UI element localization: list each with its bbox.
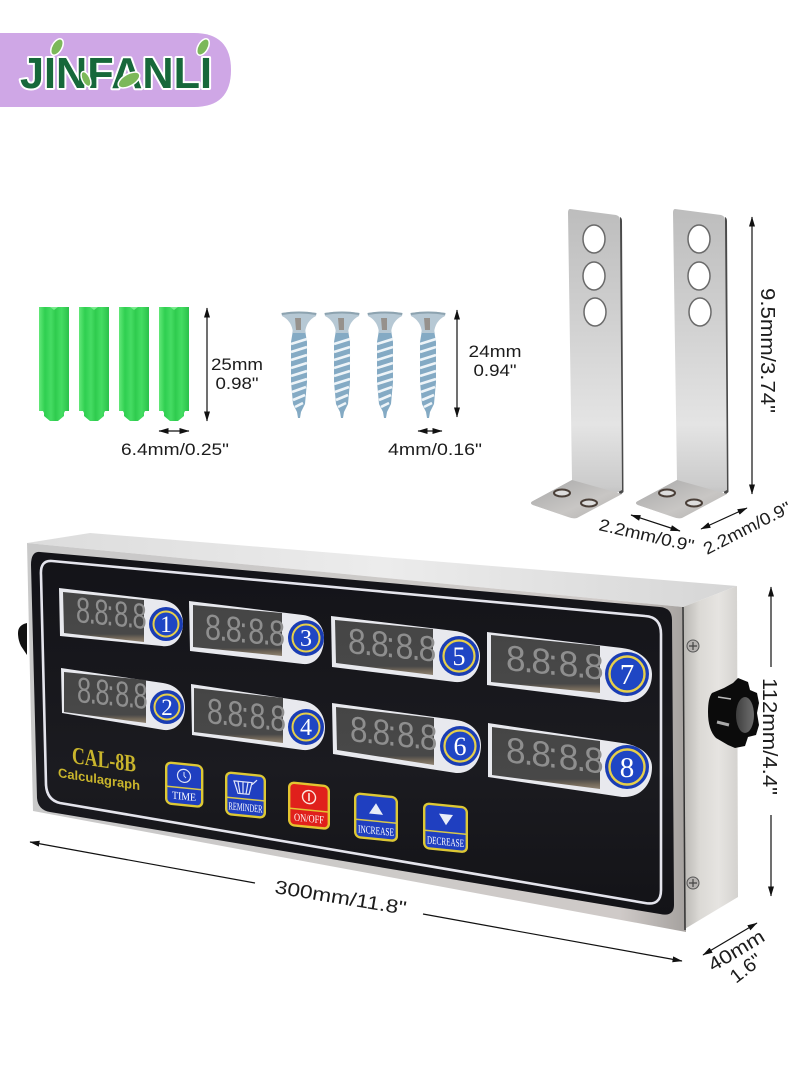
timer device [18, 533, 759, 932]
timer display 1: 8.8:8.8 [76, 590, 147, 637]
left bracket foot label: 2.2mm/0.9" [597, 515, 696, 556]
left side knob [18, 623, 27, 655]
anchor length arrow [206, 308, 208, 421]
timer display 1: 1 [160, 612, 172, 637]
timer display 5: 5 [452, 642, 466, 671]
timer display 6: 8.8:8.8 [350, 709, 437, 759]
screw length arrow [456, 310, 458, 417]
timer display 1 [59, 588, 183, 646]
anchor length label: 0.98" [216, 374, 258, 393]
button: increase [355, 793, 397, 841]
logo wordmark: JINFANLI [20, 49, 212, 98]
logo pill [0, 33, 231, 107]
timer display 2 [61, 668, 185, 730]
screw length label: 24mm [468, 342, 522, 361]
button: reminder: REMINDER [229, 800, 263, 816]
device height arrow bottom [770, 815, 772, 896]
top face [27, 533, 737, 607]
side screw bottom [687, 877, 699, 889]
timer display 2: 8.8:8.8 [77, 670, 148, 717]
right bracket foot label: 2.2mm/0.9" [700, 498, 794, 559]
timer display 3: 8.8:8.8 [205, 606, 285, 654]
front corner edge [683, 607, 685, 930]
right side face [683, 586, 738, 930]
front metal frame [27, 543, 686, 932]
button: reminder [226, 772, 265, 818]
device depth label: 40mm [705, 926, 769, 976]
black control panel [31, 552, 674, 915]
side knob [708, 678, 759, 748]
logo leaves [48, 37, 212, 91]
timer display 5: 8.8:8.8 [348, 621, 436, 670]
screw length label [468, 342, 522, 380]
timer display 4: 8.8:8.8 [207, 691, 286, 739]
left L bracket [531, 209, 624, 518]
timer display 8 [488, 723, 652, 797]
device width arrow right [423, 914, 682, 961]
anchor width arrow [159, 430, 189, 432]
timer display 8: 8.8:8.8 [506, 730, 604, 782]
button: on/off [289, 782, 329, 829]
model subtitle: Calculagraph [58, 765, 140, 793]
device height arrow top [770, 587, 772, 667]
panel white outline [41, 561, 661, 903]
timer display 6 [332, 703, 481, 773]
device depth label: 1.6" [726, 950, 767, 988]
timer display 5 [331, 616, 480, 682]
timer display 3 [189, 601, 324, 664]
button: time: TIME [172, 790, 196, 804]
right bracket foot arrow [701, 508, 747, 529]
timer display 6: 6 [454, 732, 466, 761]
timer display 8: 8 [620, 752, 634, 784]
device height label: 112mm/4.4" [758, 678, 780, 795]
model name: CAL-8B [72, 743, 136, 778]
bracket height label: 9.5mm/3.74" [756, 288, 778, 413]
screw length label: 0.94" [474, 361, 516, 380]
anchor length label [211, 355, 263, 393]
device width label: 300mm/11.8" [273, 877, 408, 920]
screws [282, 312, 446, 418]
button: on/off: ON/OFF [294, 812, 324, 827]
device depth label [705, 926, 769, 988]
timer display 7: 7 [620, 659, 634, 691]
button: decrease [424, 803, 467, 852]
timer display 2: 2 [161, 695, 173, 720]
bracket height arrow [751, 217, 753, 494]
device depth arrow [703, 923, 757, 955]
timer display 7 [487, 632, 652, 702]
screw width label: 4mm/0.16" [388, 440, 482, 459]
button: increase: INCREASE [358, 823, 394, 839]
left bracket foot arrow [631, 515, 680, 531]
brand logo [0, 33, 231, 107]
button: decrease: DECREASE [427, 834, 464, 850]
device width arrow left [30, 842, 255, 883]
anchor width label: 6.4mm/0.25" [121, 440, 229, 459]
timer display 3: 3 [300, 626, 312, 652]
timer display 4: 4 [300, 715, 312, 741]
timer display 7: 8.8:8.8 [506, 638, 604, 688]
timer display 4 [191, 684, 325, 750]
side screw top [687, 640, 699, 652]
right L bracket [636, 209, 728, 518]
green wall anchors [39, 307, 189, 421]
screw width arrow [418, 430, 442, 432]
anchor length label: 25mm [211, 355, 263, 374]
button: time [166, 762, 202, 807]
